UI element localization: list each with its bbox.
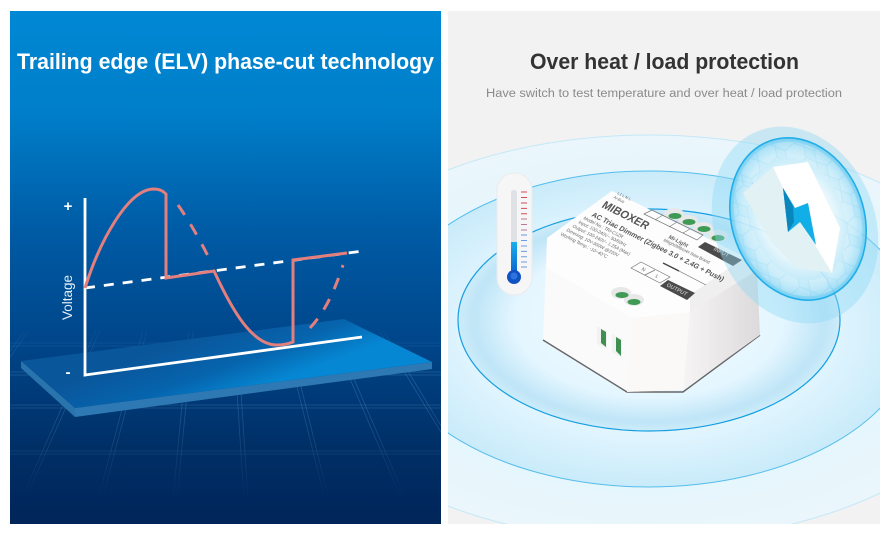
terminal holes xyxy=(611,208,728,306)
product label text: Mi-Light xyxy=(667,235,689,249)
thermometer icon xyxy=(497,173,532,295)
product label text: L xyxy=(654,274,660,280)
heading: left: Trailing edge (ELV) phase-cut technology xyxy=(17,49,434,74)
product label text: N xyxy=(640,267,647,273)
product label text: AC Triac Dimmer (Zigbee 3.0 + 2.4G + Push) xyxy=(590,211,726,283)
product label text: Output: 100-240V~ 1.25A (Max) xyxy=(571,224,632,257)
dimmer device xyxy=(543,191,760,392)
dimmed waveform xyxy=(85,189,347,345)
cut-off waveform dashed xyxy=(176,204,209,256)
product label text: Working Temp.: -10~40°C xyxy=(559,232,609,259)
product label text: Dimming: 10V-300W @220V xyxy=(565,228,621,258)
axes xyxy=(85,198,362,375)
shield with lightning bolt xyxy=(712,126,878,324)
zero line dashed xyxy=(85,251,363,288)
voltage chart xyxy=(85,189,363,375)
panel: over heat protection xyxy=(448,11,880,524)
product label text: Milight/Miboxer New Brand xyxy=(662,238,712,265)
subheading: Have switch to test temperature and over heat / load protection xyxy=(486,88,842,100)
heading: right: Over heat / load protection xyxy=(530,49,799,74)
axis label: minus: - xyxy=(66,364,70,381)
concentric rings xyxy=(448,134,880,524)
product label text: L1 L N L xyxy=(616,191,633,202)
product label text: INPUT xyxy=(712,247,730,259)
product label text: Model No.: TRI-C1ZR xyxy=(582,216,625,240)
product label text: MIBOXER xyxy=(599,200,652,232)
output slots xyxy=(597,326,607,349)
product label text: Ai-Bus xyxy=(612,195,626,204)
platform xyxy=(21,319,432,417)
product label text: OUTPUT xyxy=(665,283,689,298)
axis label: plus: + xyxy=(64,198,73,215)
lightning bolt xyxy=(743,162,840,273)
product label text: Input: 100-240V~ 50/60Hz xyxy=(577,220,628,248)
panel: trailing edge phase-cut xyxy=(10,11,441,524)
product label text xyxy=(559,191,742,300)
axis label: voltage: Voltage xyxy=(60,275,75,320)
